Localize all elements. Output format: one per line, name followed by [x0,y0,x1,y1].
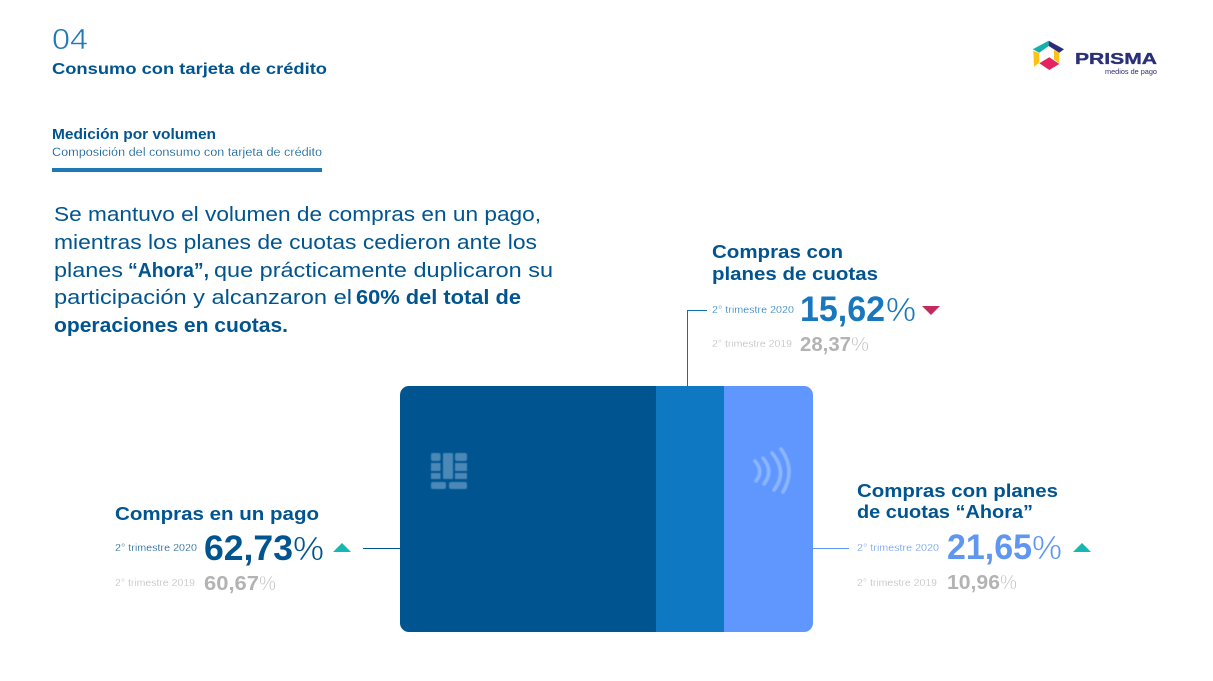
icon: down arrow [922,306,940,315]
credit card [400,386,813,632]
connector: installment plans [688,310,707,386]
logo: Prisma: medios de pago [1105,67,1157,76]
intro paragraph [54,204,553,337]
panel: compras con planes de cuotas Ahora [857,481,1091,594]
intro paragraph: Se mantuvo el volumen de compras en un pago, [54,204,541,226]
panel: compras con planes de cuotas: % [851,334,869,356]
section number: 04 [52,24,88,56]
panel: compras con planes de cuotas Ahora: % [1000,572,1017,594]
panel: compras en un pago: 60,67 [204,573,259,595]
panel: compras con planes de cuotas Ahora: de cuotas “Ahora” [857,502,1033,522]
intro paragraph: planes [54,260,123,282]
panel: compras con planes de cuotas Ahora: 2° trimestre 2020 [857,543,939,554]
connector: single payment [363,548,400,550]
intro paragraph: participación y alcanzaron el [54,287,352,309]
panel: compras en un pago [115,504,351,595]
panel: compras en un pago: % [259,573,276,595]
intro paragraph: que prácticamente duplicaron su [214,260,553,282]
subheading block: Composición del consumo con tarjeta de crédito [52,147,322,159]
title: Consumo con tarjeta de crédito [52,61,327,78]
panel: compras con planes de cuotas: planes de cuotas [712,264,878,284]
panel: compras con planes de cuotas Ahora: % [1032,529,1062,566]
intro paragraph: 60% del total de [356,287,521,309]
panel: compras en un pago: % [293,530,324,567]
icon: card chip [431,453,467,489]
panel: compras en un pago: 2° trimestre 2020 [115,543,197,554]
panel: compras con planes de cuotas: % [886,291,916,328]
panel: compras en un pago: Compras en un pago [115,504,319,524]
panel: compras con planes de cuotas: 2° trimestre 2019 [712,339,792,350]
intro paragraph: mientras los planes de cuotas cedieron ante los [54,232,537,254]
logo: Prisma: PRISMA [1075,51,1158,68]
subheading block: Medición por volumen [52,127,216,143]
panel: compras con planes de cuotas: 2° trimestre 2020 [712,305,794,316]
panel: compras con planes de cuotas Ahora: 2° trimestre 2019 [857,578,937,589]
subheading block [52,127,322,172]
panel: compras con planes de cuotas: Compras con [712,242,843,262]
intro paragraph: operaciones en cuotas. [54,315,288,337]
icon: up arrow [1073,543,1091,552]
panel: compras con planes de cuotas Ahora: Compras con planes [857,481,1058,501]
panel: compras con planes de cuotas Ahora: 21,65 [947,528,1032,567]
connector: Ahora plans [813,548,849,550]
panel: compras con planes de cuotas Ahora: 10,96 [947,572,1000,594]
panel: compras con planes de cuotas [712,242,940,356]
panel: compras en un pago: 62,73 [204,529,293,568]
icon: contactless waves [755,449,789,492]
icon: up arrow [333,543,351,552]
logo: Prisma [1033,41,1158,76]
panel: compras en un pago: 2° trimestre 2019 [115,578,195,589]
panel: compras con planes de cuotas: 15,62 [800,290,885,329]
intro paragraph: “Ahora”, [128,260,209,282]
panel: compras con planes de cuotas: 28,37 [800,334,851,356]
